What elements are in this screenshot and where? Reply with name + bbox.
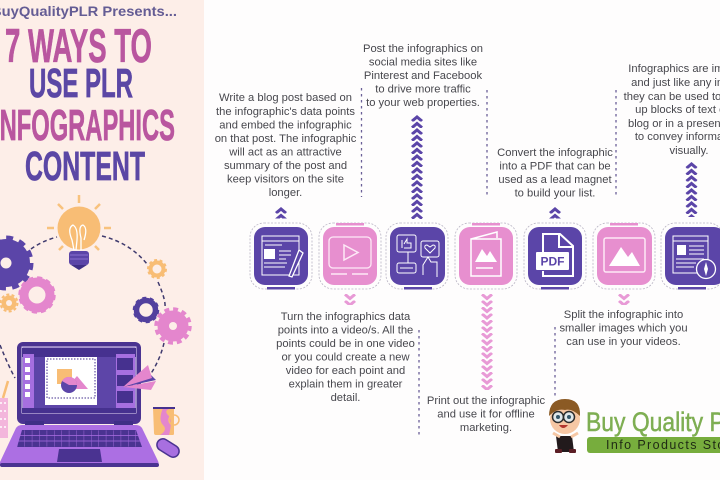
dotted connector lines <box>362 88 616 438</box>
text block: PDF: used as a lead magnet <box>498 174 612 186</box>
dashed connecting path <box>0 236 165 378</box>
text block: blog post: will act as an attractive <box>228 146 342 158</box>
text block: blog post: longer. <box>269 187 302 199</box>
text block: split <box>559 309 688 348</box>
text block: print <box>427 395 545 434</box>
text block: print: and use it for offline <box>437 408 535 420</box>
text block: social media: to drive more traffic <box>375 84 471 96</box>
text block: blog post <box>215 92 357 199</box>
text block: video: detail. <box>331 392 360 404</box>
text block: social media: Post the infographics on <box>363 43 483 55</box>
text block: images <box>624 63 720 157</box>
icon: light bulb <box>47 195 111 270</box>
text block: video: or you could create a new <box>281 352 410 364</box>
icon: image <box>593 223 655 289</box>
text block: blog post: and embed the infographic <box>219 120 352 132</box>
text block: print: Print out the infographic <box>427 395 545 407</box>
icon: PDF <box>524 223 586 290</box>
text block: social media: Pinterest and Facebook <box>364 70 482 82</box>
text block: print: marketing. <box>460 422 512 434</box>
arrows: upward chevrons <box>275 115 698 219</box>
text block: blog post: keep visitors on the site <box>227 174 344 186</box>
logo strapline bar <box>587 437 720 453</box>
icon: pencil cup <box>0 381 8 438</box>
text block: split: smaller images which you <box>559 322 688 334</box>
icon: coffee mug <box>153 407 179 435</box>
icon: PDF: PDF <box>540 254 564 268</box>
text block: blog post: on that post. The infographic <box>215 133 357 145</box>
text block: video <box>276 311 415 404</box>
title <box>0 19 175 189</box>
logo: Buy Quality PLR <box>549 399 720 453</box>
text block: blog post: the infographic's data points <box>216 106 355 118</box>
icon: gears <box>0 238 190 343</box>
arrows: downward chevrons <box>344 294 630 390</box>
icon: mascot <box>549 399 580 453</box>
text block: video: Turn the infographics data <box>281 311 411 323</box>
text block: video: points could be in one video <box>276 338 415 350</box>
text block: social media: social media sites like <box>369 56 477 68</box>
text block: social media <box>363 43 483 109</box>
title: INFOGRAPHICS <box>0 101 175 150</box>
title: 7 WAYS TO <box>5 19 152 72</box>
text block: video: explain them in greater <box>289 378 403 390</box>
icon: paper plane <box>123 365 156 390</box>
icon: laptop <box>0 342 159 467</box>
text block: PDF: to build your list. <box>515 188 595 200</box>
text block: PDF <box>497 147 613 200</box>
title: USE PLR <box>29 60 133 106</box>
icon: video <box>319 223 381 289</box>
title: CONTENT <box>25 143 145 189</box>
text block: split: Split the infographic into <box>564 309 683 321</box>
text block: social media: to your web properties. <box>366 97 480 109</box>
panel: left title panel <box>0 0 204 480</box>
text block: video: video for each point and <box>286 365 405 377</box>
illustration: bulb, gears and laptop <box>0 195 190 467</box>
icon: web page <box>661 223 720 290</box>
text block: PDF: into a PDF that can be <box>499 160 611 172</box>
icon row <box>250 223 720 290</box>
text block: PDF: Convert the infographic <box>497 147 613 159</box>
text block: split: can use in your videos. <box>566 336 681 348</box>
text block: blog post: summary of the post and <box>224 160 347 172</box>
icon: blog post <box>250 223 312 290</box>
text block: video: points into a video/s. All the <box>278 324 413 336</box>
icon: social media <box>386 223 448 290</box>
icon: print out booklet <box>455 223 517 289</box>
text block: blog post: Write a blog post based on <box>219 92 352 104</box>
text block: images: visually. <box>670 145 708 157</box>
icon: mouse <box>155 437 181 459</box>
